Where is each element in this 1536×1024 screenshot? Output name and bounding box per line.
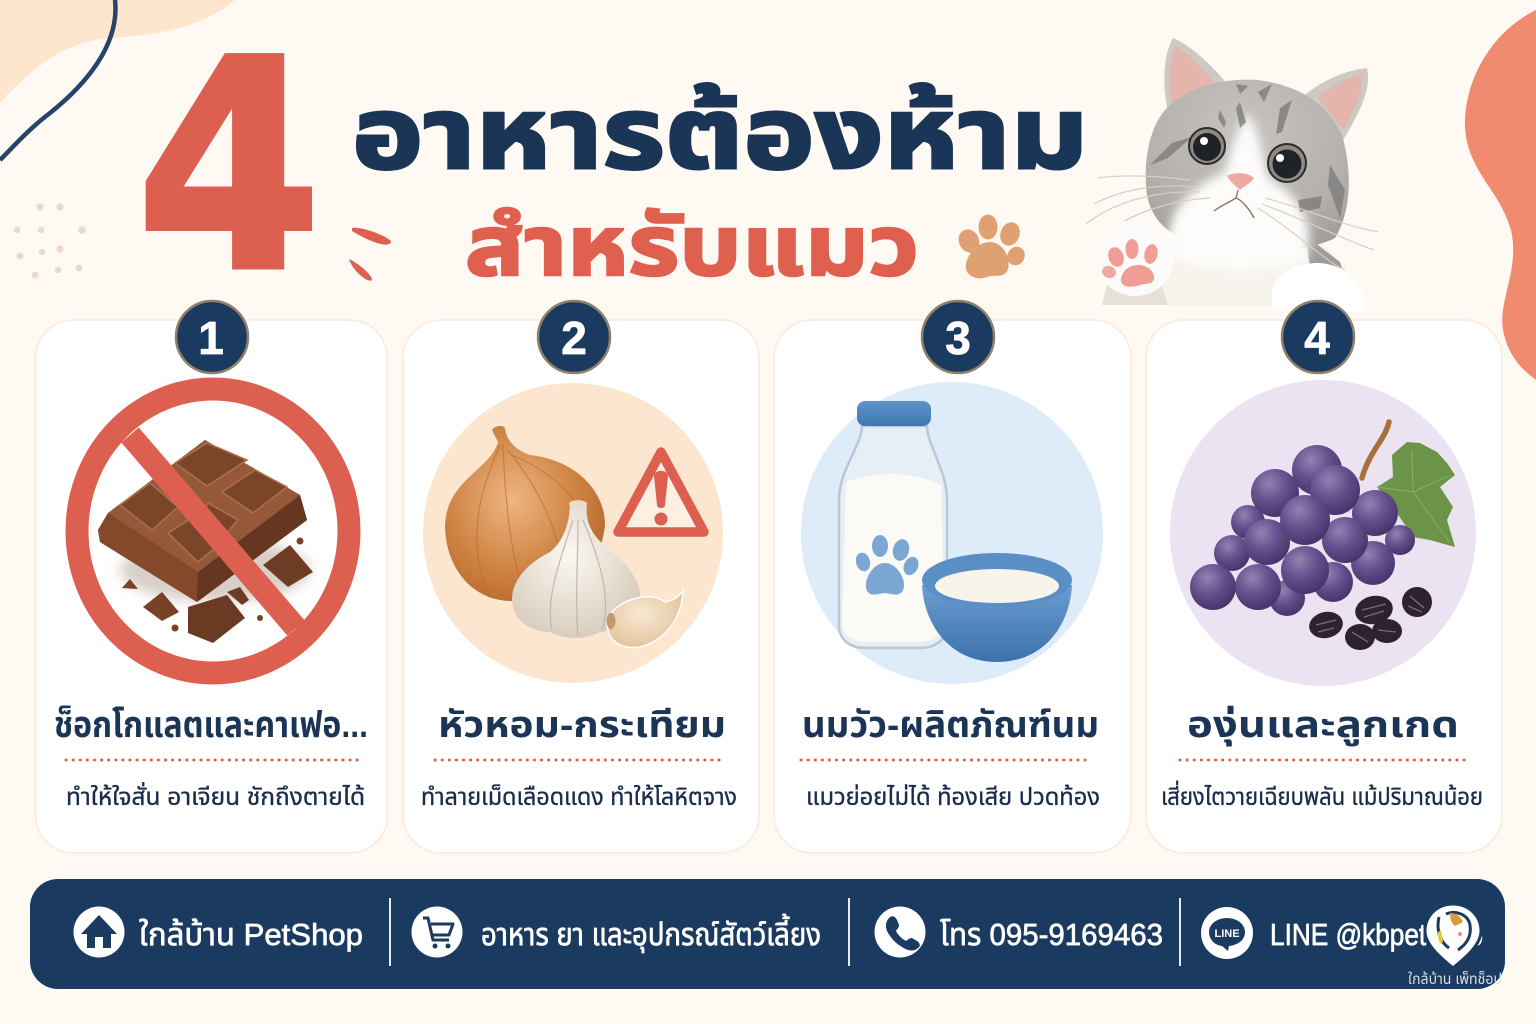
dotted divider bbox=[435, 758, 725, 762]
number badge 2: 2 bbox=[561, 312, 587, 364]
title line 1: อาหารต้องห้าม bbox=[352, 78, 1088, 190]
phone number: โทร 095-9169463 bbox=[940, 917, 1163, 952]
cat raised paw bbox=[1096, 220, 1174, 305]
card title: นมวัว-ผลิตภัณฑ์นม bbox=[802, 704, 1099, 745]
cat whiskers bbox=[1086, 176, 1378, 270]
paw on bottle bbox=[854, 535, 921, 595]
cat head bbox=[1146, 80, 1349, 252]
cat left ear bbox=[1164, 38, 1228, 112]
illustration circle bbox=[423, 383, 723, 683]
grape leaf bbox=[1377, 442, 1455, 547]
decorative dots bbox=[14, 203, 86, 279]
cat resting paw bbox=[1272, 263, 1365, 312]
icon: line: LINE bbox=[1214, 928, 1240, 940]
shop name: ใกล้บ้าน PetShop bbox=[139, 917, 363, 952]
dotted divider bbox=[1180, 758, 1465, 762]
footer background bbox=[30, 879, 1505, 989]
card description: ทำให้ใจสั่น อาเจียน ชักถึงตายได้ bbox=[66, 781, 365, 811]
decorative salmon blob bbox=[1465, 10, 1536, 380]
dotted divider bbox=[801, 758, 1090, 762]
garlic clove bbox=[606, 591, 683, 648]
big number 4: 4 bbox=[136, 0, 322, 336]
card background bbox=[774, 320, 1131, 853]
panel: card 4 grapes bbox=[1146, 301, 1502, 853]
logo: pet pin bbox=[1425, 904, 1481, 968]
footer dividers bbox=[390, 898, 1180, 966]
grape stem bbox=[1362, 422, 1389, 478]
number badge 2 bbox=[538, 301, 610, 373]
card description: เสี่ยงไตวายเฉียบพลัน แม้ปริมาณน้อย bbox=[1161, 780, 1483, 811]
icon: warning triangle bbox=[618, 452, 704, 532]
illustration circle bbox=[801, 382, 1103, 684]
number badge 4 bbox=[1282, 301, 1354, 373]
cat forehead stripes bbox=[1150, 84, 1345, 218]
card description: ทำลายเม็ดเลือดแดง ทำให้โลหิตจาง bbox=[421, 783, 737, 811]
number badge 1: 1 bbox=[198, 312, 224, 364]
card background bbox=[403, 320, 759, 853]
decorative navy curve bbox=[0, 0, 115, 160]
chocolate illustration bbox=[98, 440, 313, 643]
grape bunch bbox=[1190, 445, 1415, 616]
cat right ear bbox=[1305, 68, 1368, 142]
icon: phone bbox=[874, 906, 926, 958]
dotted divider bbox=[66, 758, 360, 762]
panel: card 1 chocolate bbox=[36, 301, 388, 853]
footer bar bbox=[30, 879, 1505, 989]
card background bbox=[36, 320, 388, 853]
number badge 3: 3 bbox=[945, 312, 971, 364]
prohibition sign bbox=[77, 389, 349, 673]
products text: อาหาร ยา และอุปกรณ์สัตว์เลี้ยง bbox=[481, 913, 821, 953]
title line 2: สำหรับแมว bbox=[465, 199, 919, 293]
card title: องุ่นและลูกเกด bbox=[1187, 704, 1459, 746]
card title: ช็อกโกแลตและคาเฟอ... bbox=[54, 704, 368, 745]
cat illustration bbox=[1086, 38, 1378, 312]
cat white muzzle bbox=[1169, 112, 1309, 271]
raisins bbox=[1307, 587, 1432, 650]
icon: cart bbox=[412, 906, 462, 958]
icon: home bbox=[74, 906, 124, 958]
line id text: LINE @kbpetshop bbox=[1270, 917, 1483, 952]
number badge 4: 4 bbox=[1304, 312, 1330, 364]
panel: card 2 onion and garlic bbox=[403, 301, 759, 853]
onion bbox=[445, 426, 605, 601]
garlic bulb bbox=[512, 500, 640, 638]
logo caption: ใกล้บ้าน เพ็ทช็อป bbox=[1408, 970, 1502, 988]
icon: paw bbox=[955, 214, 1028, 278]
cat left eye bbox=[1189, 128, 1225, 164]
cat body bbox=[1150, 225, 1350, 305]
card description: แมวย่อยไม่ได้ ท้องเสีย ปวดท้อง bbox=[806, 783, 1100, 811]
accent strokes bbox=[349, 228, 391, 281]
icon: line bbox=[1201, 907, 1253, 959]
number badge 1 bbox=[176, 301, 248, 373]
decorative peach blob bbox=[0, 0, 235, 103]
milk bottle bbox=[839, 401, 947, 648]
cat nose and mouth bbox=[1214, 173, 1254, 218]
card background bbox=[1146, 320, 1502, 853]
panel: card 3 milk bbox=[774, 301, 1131, 853]
blue bowl with milk bbox=[922, 553, 1072, 662]
card title: หัวหอม-กระเทียม bbox=[438, 704, 726, 745]
cat body shading bbox=[1305, 235, 1352, 298]
cat right eye bbox=[1268, 144, 1306, 182]
illustration circle bbox=[1170, 380, 1476, 686]
number badge 3 bbox=[922, 301, 994, 373]
